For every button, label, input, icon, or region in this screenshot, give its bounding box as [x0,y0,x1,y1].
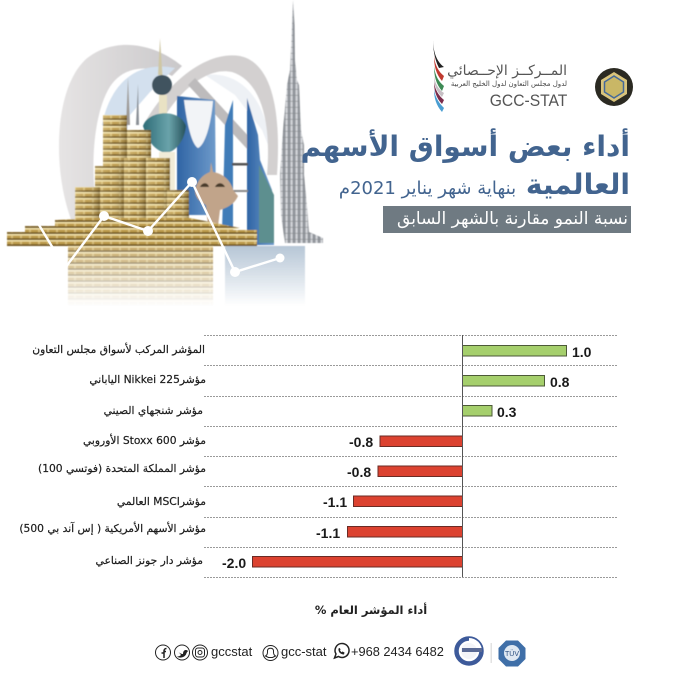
label shanghai: مؤشر شنجهاي الصيني [104,404,203,417]
label sp500: مؤشر الأسهم الأمريكية ( إس آند بي 500) [19,522,206,535]
hero illustration: skyline and gold coins [6,2,324,300]
value -1.1 sp500: -1.1 [316,525,340,541]
negative red bars [252,436,462,567]
title line one: أداء بعض أسواق الأسهم [301,130,630,163]
contact text phone: +968 2434 6482 [351,644,444,659]
value -1.1 msci: -1.1 [323,494,347,510]
icon: facebook [156,645,170,660]
value -0.8 stoxx: -0.8 [349,434,373,450]
icon: snapchat [263,646,278,660]
value 0.3: 0.3 [497,404,516,420]
Bahrain twin blue towers [222,98,274,245]
zero axis [462,335,464,577]
label msci: مؤشرMSCI العالمي [117,495,206,508]
coin reflection [68,246,305,306]
label nikkei: مؤشر225 Nikkei الياباني [89,373,206,386]
label gcc composite: المؤشر المركب لأسواق مجلس التعاون [32,343,205,356]
icon: twitter [174,645,190,660]
large grey arch [59,45,182,222]
value 1.0: 1.0 [572,344,591,360]
Oman incense burner monument [195,162,238,226]
subtitle banner [383,206,631,233]
contact text gcc-stat: gcc-stat [281,644,327,659]
contact text gccstat: gccstat [211,644,252,659]
second white arch [143,55,278,175]
logo latin name: GCC-STAT [489,91,567,110]
Kuwait towers [126,38,186,202]
label dow: مؤشر دار جونز الصناعي [96,554,203,567]
label ftse: مؤشر المملكة المتحدة (فوتسي 100) [38,462,206,475]
logo ribbon [433,41,444,112]
logo name arabic: المــركــز الإحــصائي [447,63,567,79]
certification logo G [456,638,482,664]
logo subtitle arabic: لدول مجلس التعاون لدول الخليج العربية [451,80,567,88]
GCC emblem [595,68,633,106]
gold coin stacks [7,115,257,246]
TUV logo: TÜV [505,650,519,658]
value -0.8 ftse: -0.8 [347,464,371,480]
positive green bars [462,346,566,416]
Kingdom Centre blue tower [177,96,216,215]
glass dome lattice [102,67,270,150]
TUV logo [498,640,526,666]
label stoxx: مؤشر 600 Stoxx الأوروبي [83,434,206,447]
Burj Khalifa tower [280,0,323,243]
subtitle banner: نسبة النمو مقارنة بالشهر السابق [397,209,628,229]
value -2.0 dow: -2.0 [222,555,246,571]
title line two: العالمية بنهاية شهر يناير 2021م [339,168,630,201]
axis title: أداء المؤشر العام % [315,603,427,617]
icon: whatsapp [334,643,349,658]
GCC-STAT logo [433,41,567,112]
value 0.8: 0.8 [550,374,569,390]
icon: instagram [192,645,208,660]
white trend line with dots [36,177,284,277]
